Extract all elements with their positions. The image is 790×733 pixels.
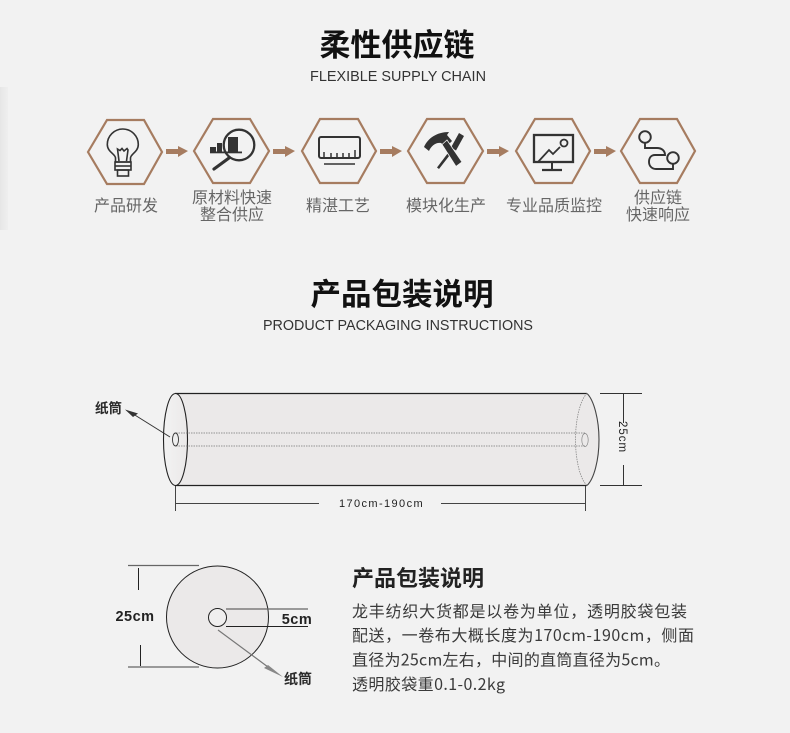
dimension: 25cm <box>115 566 199 667</box>
inner tube circle <box>208 608 226 626</box>
icon: light bulb <box>107 129 138 176</box>
arrow <box>594 146 616 157</box>
text block: packaging description: 产品包装说明 <box>352 566 484 591</box>
dimension: length: 170cm-190cm <box>339 498 424 510</box>
step 4: modular production <box>406 119 486 215</box>
dimension: length <box>176 486 586 511</box>
dimension: 5cm <box>226 609 312 628</box>
diagram: paper roll side view <box>95 394 642 511</box>
dimension: diameter: 25cm <box>616 421 628 453</box>
dimension: 25cm: 25cm <box>115 609 155 625</box>
title: product packaging instructions: 产品包装说明 <box>310 278 494 312</box>
icon: route nodes <box>639 131 679 169</box>
step 2: raw material integration: 原材料快速 <box>192 189 272 207</box>
step 3: refined craft <box>302 119 376 215</box>
label: paper tube with arrow <box>218 630 312 687</box>
text block: packaging description: 直径为25cm左右，中间的直筒直径为5cm。 <box>352 646 670 670</box>
text block: packaging description: 透明胶袋重0.1-0.2kg <box>352 671 505 695</box>
step 1: product research <box>88 120 162 215</box>
icon: monitor with chart <box>534 135 573 170</box>
step 5: quality monitoring <box>506 119 602 215</box>
icon: hammer and screwdriver <box>424 132 464 169</box>
arrow <box>487 146 509 157</box>
step 2: raw material integration: 整合供应 <box>200 205 264 224</box>
arrow <box>166 146 188 157</box>
text block: packaging description: 龙丰纺织大货都是以卷为单位，透明胶袋包装 <box>352 598 687 622</box>
step 3: refined craft: 精湛工艺 <box>306 197 370 215</box>
title: product packaging instructions: PRODUCT PACKAGING INSTRUCTIONS <box>263 318 533 334</box>
step 1: product research: 产品研发 <box>94 197 158 215</box>
icon: ruler <box>319 137 360 164</box>
process flow <box>88 119 695 224</box>
step 4: modular production: 模块化生产 <box>406 197 486 215</box>
right end cap <box>576 394 587 486</box>
step 5: quality monitoring: 专业品质监控 <box>506 197 602 215</box>
dimension: diameter <box>600 394 642 486</box>
inner tube <box>176 433 586 446</box>
label: paper tube with arrow <box>95 400 170 437</box>
arrow <box>273 146 295 157</box>
label: paper tube with arrow: 纸筒 <box>284 671 312 687</box>
side strip <box>0 87 8 230</box>
roll body <box>175 394 599 486</box>
step 2: raw material integration <box>192 119 272 224</box>
title: flexible supply chain: 柔性供应链 <box>320 28 474 63</box>
dimension: 5cm: 5cm <box>282 612 312 628</box>
text block: packaging description <box>352 566 694 695</box>
icon: magnifier with bars <box>210 130 254 169</box>
left end cap <box>164 394 188 486</box>
title: flexible supply chain: FLEXIBLE SUPPLY CHAIN <box>310 69 486 85</box>
diagram: roll cross-section <box>115 566 312 687</box>
title: product packaging instructions <box>263 278 533 334</box>
step 6: supply chain response: 供应链 <box>634 188 682 207</box>
outer circle <box>166 566 268 668</box>
arrow <box>380 146 402 157</box>
step 6: supply chain response <box>621 119 695 224</box>
label: paper tube with arrow: 纸筒 <box>95 400 122 416</box>
step 6: supply chain response: 快速响应 <box>626 205 690 224</box>
title: flexible supply chain <box>310 28 486 85</box>
text block: packaging description: 配送，一卷布大概长度为170cm-190cm，侧面 <box>352 622 694 646</box>
